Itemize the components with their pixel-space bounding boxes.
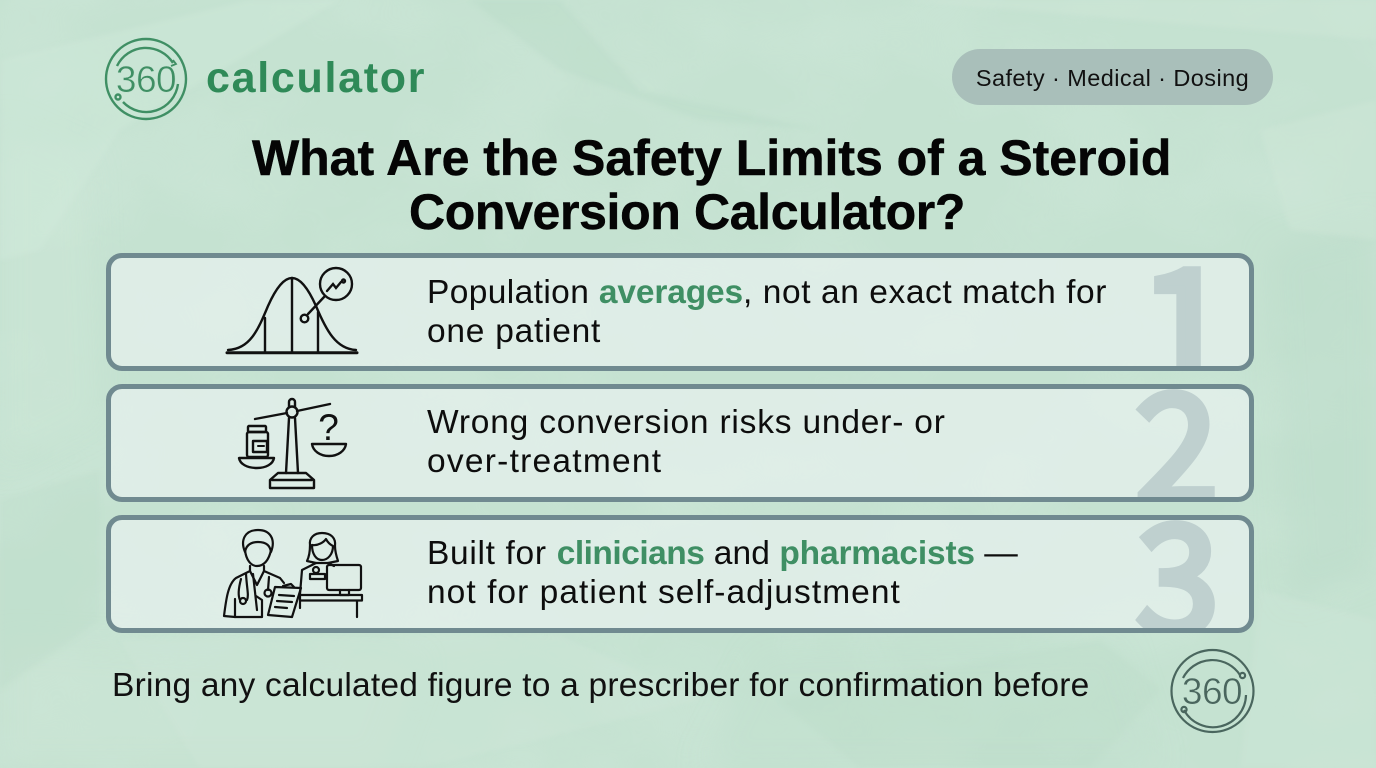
icon: 360 watermark badge: 360 <box>1182 671 1242 712</box>
line 5: Built for clinicians and pharmacists — <box>427 535 1018 572</box>
title <box>252 130 1171 240</box>
icon: balance scale with bottle and question mark: ? <box>318 407 339 448</box>
logo: 360 calculator <box>104 38 426 120</box>
panel: limit 2 <box>106 384 1254 502</box>
title line 1: What Are the Safety Limits of a Steroid <box>252 130 1171 186</box>
line 2: one patient <box>427 313 601 350</box>
line 1: Population averages, not an exact match for <box>427 274 1107 311</box>
tag pill <box>952 49 1273 105</box>
icon: 360 badge: 360 <box>116 59 176 100</box>
brand name: calculator <box>206 54 426 102</box>
line 4: over-treatment <box>427 443 662 480</box>
panel: limit 3 <box>106 515 1254 633</box>
icon: 360 badge <box>104 38 188 120</box>
tag pill: Safety · Medical · Dosing <box>976 65 1249 91</box>
line 6: not for patient self-adjustment <box>427 574 901 611</box>
title line 2: Conversion Calculator? <box>409 184 965 240</box>
panel: limit 1 <box>106 253 1254 371</box>
footer text: Bring any calculated figure to a prescriber for confirmation before <box>112 667 1089 704</box>
line 3: Wrong conversion risks under- or <box>427 404 946 441</box>
